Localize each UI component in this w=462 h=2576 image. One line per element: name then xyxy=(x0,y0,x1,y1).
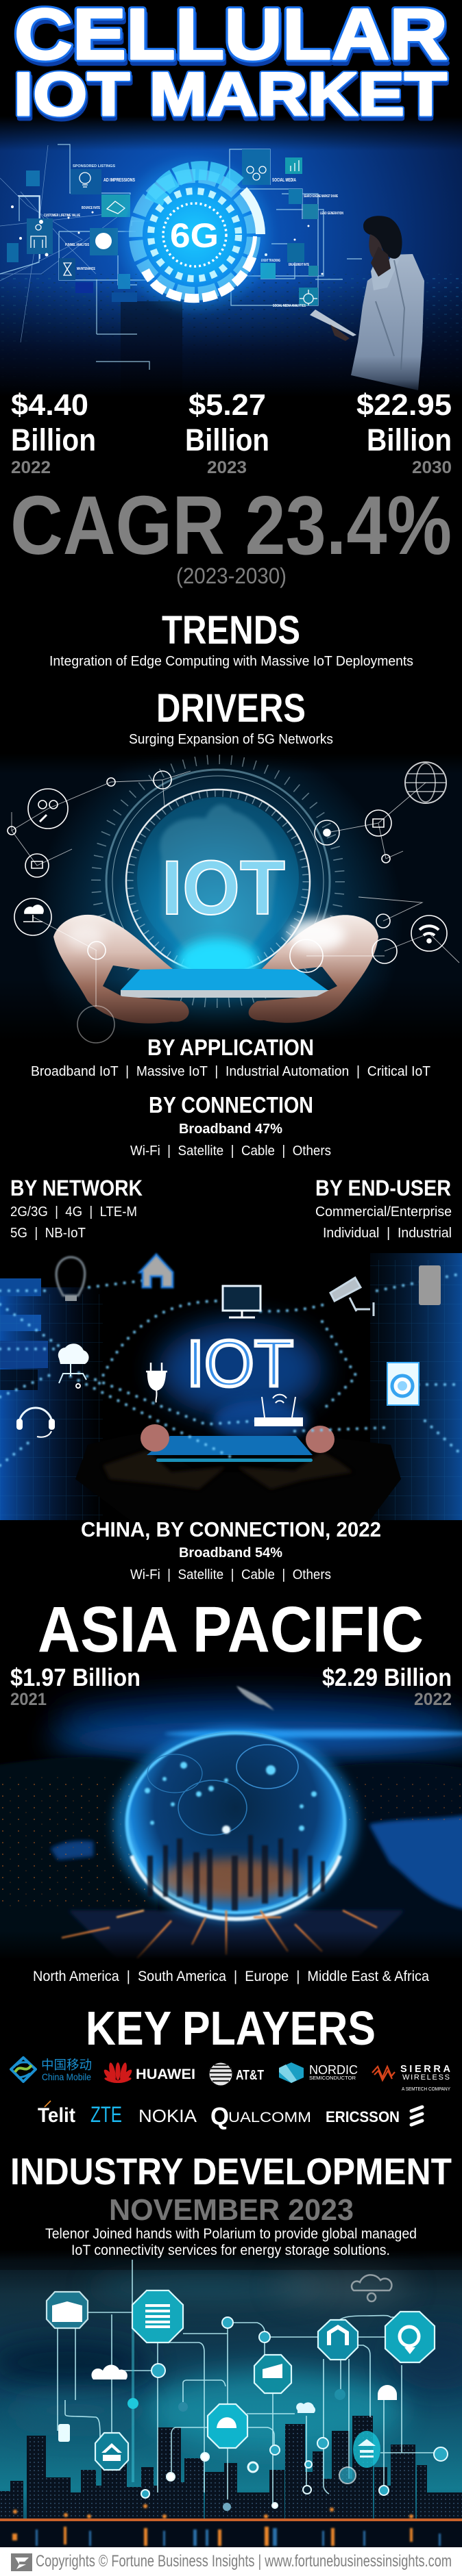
by connection xyxy=(130,1092,331,1159)
footer xyxy=(0,2547,462,2576)
development description: IoT connectivity services for energy storage solutions. xyxy=(71,2243,390,2258)
logo: Sierra Wireless: WIRELESS xyxy=(402,2073,450,2082)
market value 2030: $22.95 xyxy=(356,388,452,422)
Asia Pacific 2022 value: 2022 xyxy=(414,1690,452,1709)
glowing icons: IOT xyxy=(186,1327,293,1400)
market value 2030: 2030 xyxy=(412,458,452,477)
by network: 5G | NB-IoT xyxy=(10,1226,86,1241)
Asia Pacific 2022 value: $2.29 Billion xyxy=(322,1663,452,1691)
Asia Pacific city dome image xyxy=(0,1686,462,1962)
dotted network xyxy=(0,1274,462,1465)
trends: TRENDS xyxy=(162,608,300,653)
title xyxy=(14,0,448,131)
industry development heading xyxy=(10,2150,452,2227)
panel captions: CUSTOMER LIFETIME VALUE xyxy=(44,214,80,218)
Asia Pacific 2021 value: 2021 xyxy=(10,1690,47,1709)
market value 2022: Billion xyxy=(11,422,96,457)
China by connection xyxy=(81,1517,381,1582)
panel captions: SOCIAL MEDIA xyxy=(272,178,296,183)
market value 2022 xyxy=(11,388,96,477)
sparks beneath dome xyxy=(62,1910,377,1958)
market value 2022: $4.40 xyxy=(11,388,88,422)
person silhouette and tablet xyxy=(75,1424,401,1520)
trends: Integration of Edge Computing with Massive IoT Deployments xyxy=(49,654,413,669)
logo: Nordic: SEMICONDUCTOR xyxy=(309,2075,356,2081)
CAGR: (2023-2030) xyxy=(176,564,287,588)
IOT lettering: IOT xyxy=(162,845,285,931)
icon nodes xyxy=(8,762,459,1043)
panel captions: SPONSORED LISTINGS xyxy=(73,164,115,168)
market value 2030 xyxy=(356,388,452,477)
panel icons xyxy=(31,160,317,305)
Asia Pacific heading: ASIA PACIFIC xyxy=(38,1593,424,1666)
6G label: 6G xyxy=(170,216,219,255)
logo: AT&T: AT&T xyxy=(236,2068,264,2083)
by network xyxy=(10,1176,143,1241)
title: IOT MARKET xyxy=(14,60,447,128)
6G ring xyxy=(112,152,278,318)
by network: 2G/3G | 4G | LTE-M xyxy=(10,1204,137,1220)
China by connection: Wi-Fi | Satellite | Cable | Others xyxy=(130,1567,331,1582)
Asia Pacific 2021 value: $1.97 Billion xyxy=(10,1663,141,1691)
hero image: 6G network over city xyxy=(0,116,462,397)
other regions: North America | South America | Europe | Middle East & Africa xyxy=(33,1969,429,1984)
glowing icons xyxy=(16,1254,441,1437)
smart devices image xyxy=(0,1244,462,1520)
by end-user: Individual | Industrial xyxy=(323,1226,452,1241)
octagon nodes xyxy=(47,2290,435,2470)
panel captions: SOCIAL MEDIA ANALYTICS xyxy=(273,304,306,308)
logo: China Mobile: 中国移动 xyxy=(41,2058,92,2072)
development description xyxy=(45,2226,417,2258)
by connection: BY CONNECTION xyxy=(149,1092,313,1117)
China by connection: Broadband 54% xyxy=(179,1545,282,1561)
logo: Ericsson: ERICSSON xyxy=(326,2108,400,2125)
panel captions: ENGAGEMENT RATE xyxy=(289,263,309,267)
drivers: Surging Expansion of 5G Networks xyxy=(129,732,333,747)
China by connection: CHINA, BY CONNECTION, 2022 xyxy=(81,1517,381,1541)
panel captions: BOUNCE RATE xyxy=(82,206,100,210)
market value 2022: 2022 xyxy=(11,458,51,477)
panel captions: EVENT TRACKING xyxy=(261,259,280,263)
logo: Sierra Wireless xyxy=(372,2064,451,2092)
cupped hands and tablet xyxy=(53,915,378,1024)
Asia Pacific 2022 value xyxy=(322,1663,452,1709)
panels of marketing analytics xyxy=(0,144,362,370)
market value 2023 xyxy=(185,388,269,477)
by end-user xyxy=(315,1176,452,1241)
panel captions xyxy=(44,164,343,308)
man with tablet xyxy=(310,216,424,390)
network dots xyxy=(11,205,324,275)
drivers: DRIVERS xyxy=(156,686,306,731)
by end-user: BY END-USER xyxy=(315,1176,451,1200)
dome city xyxy=(158,1859,302,1900)
key players heading: KEY PLAYERS xyxy=(86,2002,376,2055)
by application: Broadband IoT | Massive IoT | Industrial Automation | Critical IoT xyxy=(31,1064,430,1079)
development description: Telenor Joined hands with Polarium to provide global managed xyxy=(45,2226,417,2242)
market value 2023: $5.27 xyxy=(189,388,266,422)
title: CELLULAR xyxy=(16,0,448,79)
panel captions: LEAD GENERATION xyxy=(320,212,343,216)
logo: Telit: Telit xyxy=(38,2104,75,2127)
by connection: Broadband 47% xyxy=(179,1122,282,1137)
glass dome xyxy=(127,1732,345,1919)
industry development heading: NOVEMBER 2023 xyxy=(109,2193,354,2227)
title: IOT MARKET xyxy=(14,60,447,128)
logo: Qualcomm: UALCOMM xyxy=(228,2110,311,2125)
waterfront and reflections xyxy=(0,2504,462,2548)
panel captions: AD IMPRESSIONS xyxy=(104,177,135,183)
logo: Huawei: HUAWEI xyxy=(136,2067,195,2082)
Asia Pacific 2021 value xyxy=(10,1663,141,1709)
panel captions: SEARCH ENGINE MARKET SHARE xyxy=(304,194,338,199)
logo: Nordic: NORDIC xyxy=(309,2063,358,2077)
icon: Fortune Business Insights logo xyxy=(11,2553,32,2571)
logo: Sierra Wireless: A SEMTECH COMPANY xyxy=(402,2087,450,2092)
by application: BY APPLICATION xyxy=(147,1035,314,1060)
market value 2023: Billion xyxy=(185,422,269,457)
by network: BY NETWORK xyxy=(10,1176,143,1200)
node glyphs xyxy=(52,2301,419,2461)
light nodes xyxy=(145,1762,317,1834)
buildings xyxy=(0,2416,462,2522)
globe and rings xyxy=(96,759,340,1003)
faded cloud icon xyxy=(352,2275,391,2301)
logo: China Mobile xyxy=(11,2058,92,2082)
logo: Sierra Wireless: SIERRA xyxy=(400,2064,451,2075)
connector circles xyxy=(127,2317,448,2511)
title: IOT MARKET xyxy=(15,63,447,131)
by connection: Wi-Fi | Satellite | Cable | Others xyxy=(130,1144,331,1159)
panel captions: MAINTENANCE xyxy=(77,267,95,271)
market value 2030: Billion xyxy=(367,422,452,457)
circuit lines xyxy=(58,2260,435,2506)
trends xyxy=(49,608,413,669)
logo: Nokia: NOKIA xyxy=(138,2106,197,2126)
panel captions: FUNNEL ANALYSIS xyxy=(65,243,89,247)
by end-user: Commercial/Enterprise xyxy=(315,1204,452,1220)
smart city skyline image xyxy=(0,2249,462,2548)
logo: China Mobile: China Mobile xyxy=(42,2071,91,2082)
logo: Qualcomm xyxy=(210,2102,311,2130)
logo: Qualcomm: Q xyxy=(210,2102,229,2130)
drivers xyxy=(129,686,333,747)
logo: ZTE: ZTE xyxy=(90,2102,122,2127)
market value 2023: 2023 xyxy=(207,458,247,477)
logo: Huawei xyxy=(102,2062,195,2084)
logo: AT&T xyxy=(210,2062,264,2086)
logo: Nordic xyxy=(279,2062,358,2083)
by application xyxy=(31,1035,430,1079)
IoT hands image xyxy=(0,753,462,1043)
